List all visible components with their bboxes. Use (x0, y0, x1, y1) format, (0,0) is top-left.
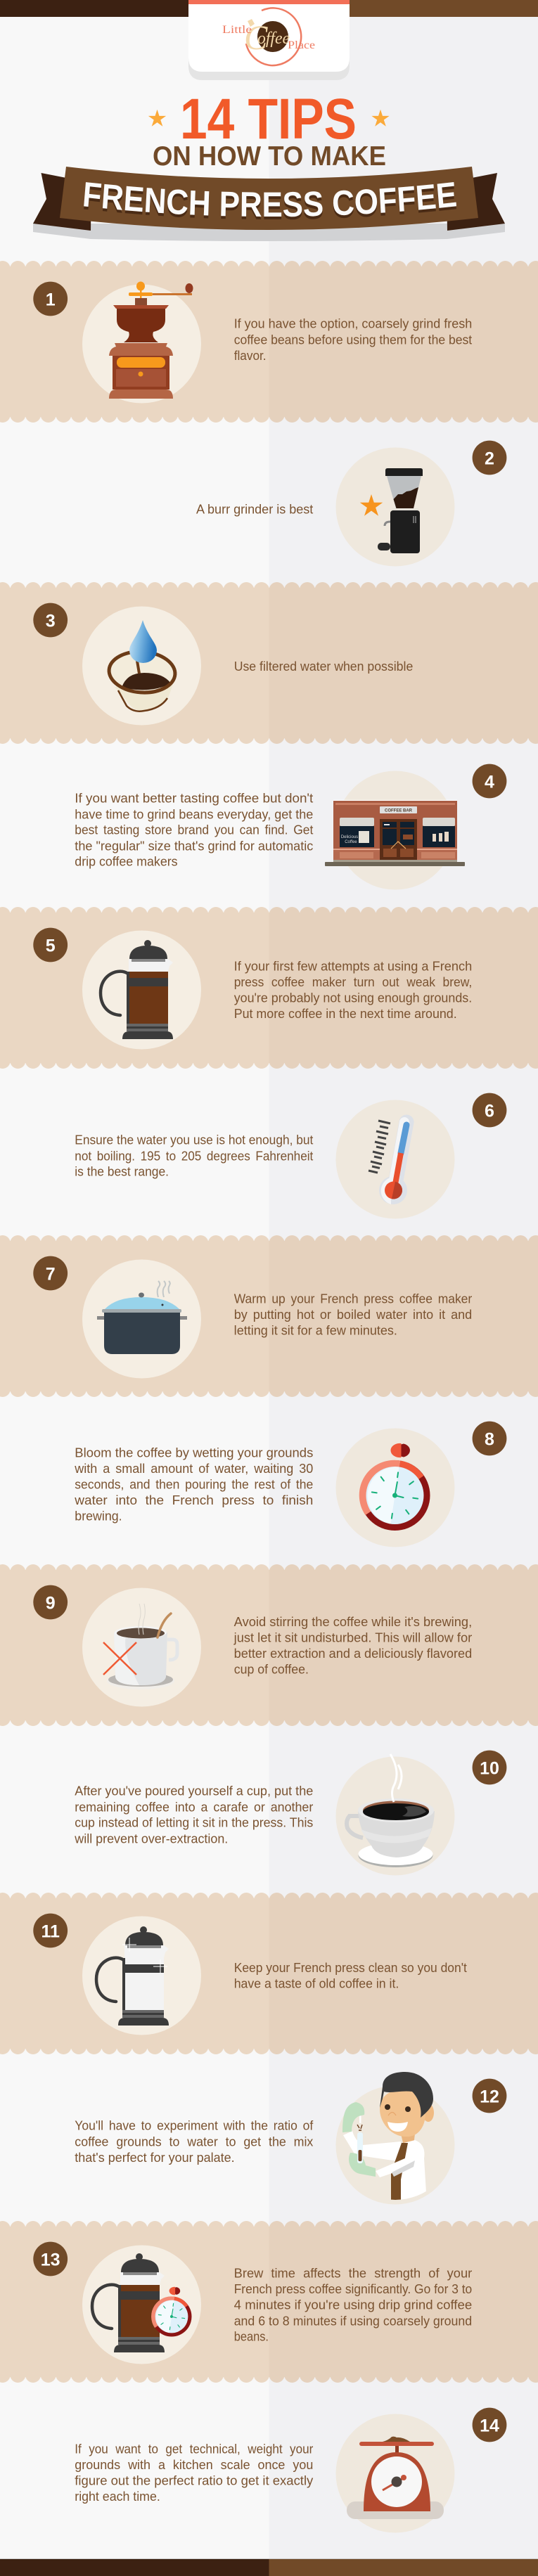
text: tip 5: you're probably not using enough grounds. (234, 991, 472, 1005)
text: tip 1 (234, 317, 472, 363)
panel: tip 9: 9 (46, 1593, 56, 1613)
panel: tip 4 (75, 764, 506, 890)
text: tip 8: brewing. (75, 1509, 122, 1524)
panel: tip 13: 13 (41, 2250, 60, 2269)
panel: tip 9 (0, 1564, 538, 1726)
logo card: Place (288, 39, 315, 51)
icon: thermometer (369, 1121, 407, 1204)
text: tip 12: You'll have to experiment with the ratio of (75, 2119, 314, 2133)
logo card: Little (222, 24, 252, 36)
header bar (0, 0, 538, 17)
panel: tip 6 (75, 1093, 506, 1219)
icon: coffee filter with water drop (108, 620, 177, 711)
text: tip 14: right each time. (75, 2490, 160, 2504)
text: tip 1: If you have the option, coarsely grind fresh (234, 317, 472, 331)
icon: coffee shop: Coffee (345, 840, 357, 844)
text: tip 6: Ensure the water you use is hot enough, but (75, 1133, 313, 1147)
panel: tip 8: 8 (485, 1430, 494, 1450)
text: tip 13: beans. (234, 2330, 269, 2344)
panel: tip 7: 7 (46, 1264, 56, 1284)
text: tip 5: press coffee maker turn out weak brew, (234, 975, 472, 989)
panel: tip 11: 11 (41, 1922, 60, 1942)
icon: scientist with test tube (342, 2072, 434, 2208)
icon: coffee shop (325, 800, 465, 866)
ribbon banner (33, 167, 505, 241)
text: tip 10: After you've poured yourself a cup, put the (75, 1784, 313, 1798)
text: tip 14: figure out the perfect ratio to get it exactly (75, 2474, 313, 2488)
text: tip 13: 4 minutes if you're using drip grind coffee (234, 2298, 472, 2312)
icon: burr grinder (360, 468, 423, 553)
text: tip 4: drip coffee makers (75, 855, 178, 869)
icon: french press with stopwatch (92, 2253, 191, 2352)
icon: cooking pot (97, 1281, 187, 1354)
text: tip 2: A burr grinder is best (196, 503, 313, 517)
icon: coffee shop: Delicious (341, 835, 358, 839)
text: tip 6 (75, 1133, 313, 1179)
panel: tip 10 (74, 1751, 506, 1876)
icon: stopwatch (359, 1443, 430, 1531)
text: tip 14: If you want to get technical, weight your (75, 2442, 313, 2456)
text: tip 12 (75, 2119, 314, 2165)
logo card: offee (257, 30, 290, 48)
text: tip 12: that's perfect for your palate. (75, 2151, 235, 2165)
text: tip 8 (74, 1445, 313, 1524)
panel: tip 2: 2 (485, 449, 494, 468)
icon: clean french press (96, 1926, 169, 2026)
ribbon banner: FRENCH PRESS COFFEE (84, 182, 456, 217)
text: tip 8: water into the French press to finish (74, 1493, 313, 1507)
panel: tip 7 (0, 1235, 538, 1397)
panel: tip 5: 5 (46, 936, 56, 956)
text: tip 12: coffee grounds to water to get the mix (75, 2134, 313, 2149)
text: tip 6: is the best range. (75, 1165, 169, 1179)
text: tip 14: grounds with a kitchen scale once you (75, 2458, 313, 2472)
text: tip 8: with a small amount of water, waiting 30 (74, 1462, 313, 1476)
text: tip 3: Use filtered water when possible (234, 659, 413, 674)
text: tip 1: flavor. (234, 349, 267, 363)
panel: tip 8 (74, 1422, 506, 1547)
panel: tip 10: 10 (480, 1759, 499, 1779)
text: tip 9 (233, 1615, 472, 1676)
text: tip 14 (75, 2442, 313, 2504)
text: tip 4: the "regular" size that's grind for automatic (75, 839, 313, 853)
text: tip 9: cup of coffee. (234, 1662, 309, 1676)
icon: french press (101, 940, 173, 1039)
icon: coffee mill (109, 281, 193, 399)
text: tip 6: not boiling. 195 to 205 degrees Fahrenheit (75, 1149, 313, 1163)
footer bar (0, 2558, 538, 2576)
panel: tip 13 (0, 2221, 538, 2383)
text: tip 11: have a taste of old coffee in it. (234, 1976, 399, 1990)
text: tip 4: If you want better tasting coffee but don't (75, 792, 313, 806)
text: tip 8: Bloom the coffee by wetting your grounds (75, 1445, 313, 1460)
panel: tip 1 (0, 261, 538, 423)
panel: tip 12 (75, 2072, 506, 2208)
text: tip 10 (74, 1784, 313, 1846)
panel: tip 4: 4 (485, 772, 494, 792)
text: tip 7 (234, 1292, 472, 1337)
text: tip 7: letting it sit for a few minutes. (234, 1323, 397, 1337)
text: tip 5: Put more coffee in the next time around. (234, 1007, 457, 1021)
panel: tip 3: 3 (46, 612, 56, 631)
title: 14 TIPS (180, 87, 357, 151)
text: tip 7: by putting hot or boiled water into it and (234, 1308, 472, 1322)
title (148, 87, 390, 172)
icon: cup of black coffee (347, 1754, 435, 1867)
text: tip 10: cup instead of letting it sit in the press. This (75, 1816, 313, 1830)
text: tip 13 (234, 2267, 472, 2344)
text: tip 5: If your first few attempts at using a French (234, 959, 472, 973)
panel: tip 2 (196, 441, 506, 567)
logo card (188, 0, 350, 80)
text: tip 9: just let it sit undisturbed. This will allow for (233, 1630, 472, 1644)
panel: tip 14 (75, 2408, 506, 2532)
text: tip 10: will prevent over-extraction. (74, 1831, 228, 1846)
text: tip 4: have time to grind beans everyday, get the (75, 807, 313, 821)
text: tip 8: seconds, and then pouring the rest of the (75, 1478, 313, 1492)
icon: coffee shop: COFFEE BAR (385, 809, 413, 813)
text: tip 1: coffee beans before using them for the best (234, 333, 472, 347)
panel: tip 3 (0, 582, 538, 744)
text: tip 10: remaining coffee into a carafe or another (75, 1800, 313, 1814)
text: tip 7: Warm up your French press coffee maker (234, 1292, 472, 1306)
icon: coffee cup crossed out (103, 1604, 177, 1689)
text: tip 4: best tasting store brand you can find. Get (75, 823, 313, 837)
text: tip 13: and 6 to 8 minutes if using coarsely ground (234, 2314, 472, 2328)
text: tip 4 (75, 792, 313, 869)
text: tip 11: Keep your French press clean so you don't (234, 1961, 467, 1975)
text: tip 11 (234, 1961, 467, 1990)
panel: tip 12: 12 (480, 2087, 499, 2106)
text: tip 9: better extraction and a deliciously flavored (234, 1647, 472, 1661)
text: tip 5 (234, 959, 472, 1021)
logo card: C (244, 18, 268, 57)
panel: tip 1: 1 (46, 290, 56, 309)
panel: tip 5 (0, 907, 538, 1069)
text: tip 9: Avoid stirring the coffee while it's brewing, (234, 1615, 472, 1629)
panel: tip 6: 6 (485, 1101, 494, 1121)
text: tip 13: Brew time affects the strength of your (234, 2267, 472, 2281)
panel: tip 14: 14 (480, 2416, 499, 2435)
ribbon banner: FRENCH PRESS COFFEE (84, 186, 456, 219)
text: tip 13: French press coffee significantly. Go for 3 to (234, 2282, 472, 2296)
title: ON HOW TO MAKE (153, 141, 386, 172)
icon: kitchen scale (347, 2437, 444, 2519)
panel: tip 11 (0, 1893, 538, 2054)
